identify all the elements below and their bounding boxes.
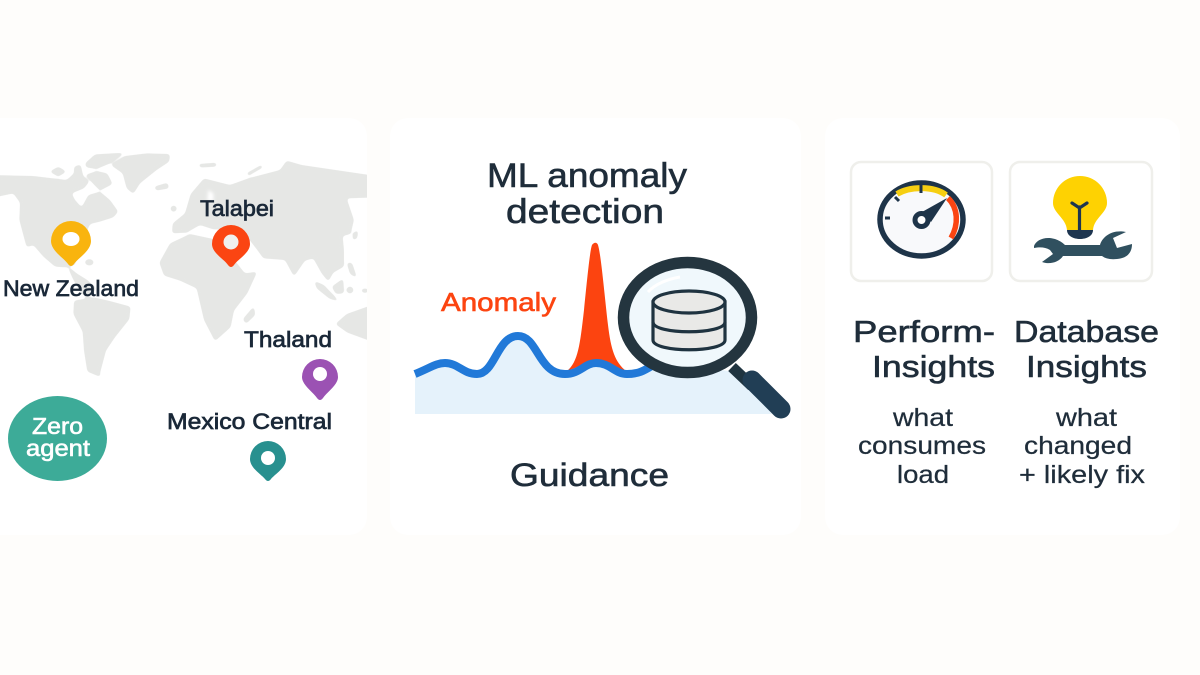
icon: magnifier with database — [624, 262, 781, 409]
text: what consumes load: what — [892, 404, 953, 432]
icon: teal pin hole — [261, 451, 275, 465]
icon: yellow pin — [51, 221, 91, 266]
text: what changed likely fix — [1019, 404, 1146, 489]
icon: red pin — [212, 225, 250, 267]
heading: ML anomaly detection — [487, 157, 687, 231]
infographic canvas — [0, 153, 1158, 488]
world map — [0, 153, 377, 377]
badge: zero agent: Zero — [32, 413, 83, 439]
icon: wrench — [1034, 231, 1132, 263]
chart: anomaly line — [415, 243, 772, 414]
label: anomaly: Anomaly — [441, 287, 556, 317]
badge: zero agent — [8, 396, 107, 481]
text: what changed likely fix: changed — [1024, 432, 1132, 460]
text: what consumes load — [858, 404, 986, 489]
text: performance insights: Insights — [872, 349, 995, 384]
label: Mexico Central: Mexico Central — [167, 409, 332, 434]
label: New Zealand: New Zealand — [3, 276, 139, 301]
panel: insights — [825, 118, 1180, 535]
icon: purple pin hole — [313, 367, 327, 381]
badge: zero agent: agent — [26, 435, 91, 461]
heading: ML anomaly detection: detection — [506, 193, 664, 231]
label: Thailand: Thaland — [244, 327, 332, 352]
text: what consumes load: load — [897, 461, 949, 489]
database cylinder — [653, 291, 725, 350]
text: performance insights — [853, 314, 995, 384]
icon: lightbulb — [1053, 176, 1107, 239]
text: database insights: Database — [1014, 314, 1159, 349]
panel: ML anomaly detection — [390, 118, 801, 535]
tile: database insights icon — [1010, 162, 1152, 281]
heading: ML anomaly detection: ML anomaly — [487, 157, 687, 195]
icon: yellow pin hole — [62, 232, 80, 246]
text: database insights: Insights — [1026, 349, 1147, 384]
icon: gauge — [880, 183, 963, 256]
tile: performance gauge — [851, 162, 992, 281]
text: performance insights: Perform- — [853, 314, 995, 349]
label: guidance: Guidance — [510, 457, 669, 493]
icon: purple pin — [302, 359, 338, 400]
icon: teal pin — [250, 441, 286, 481]
panel: global regions map — [0, 153, 367, 481]
text: what changed likely fix: what — [1055, 404, 1117, 432]
icon: red pin hole — [224, 234, 238, 250]
text: what consumes load: consumes — [858, 432, 986, 460]
text: what changed likely fix: + likely fix — [1019, 461, 1146, 489]
text: database insights — [1014, 314, 1159, 384]
label: Taiwan city: Talaþei — [200, 196, 274, 221]
